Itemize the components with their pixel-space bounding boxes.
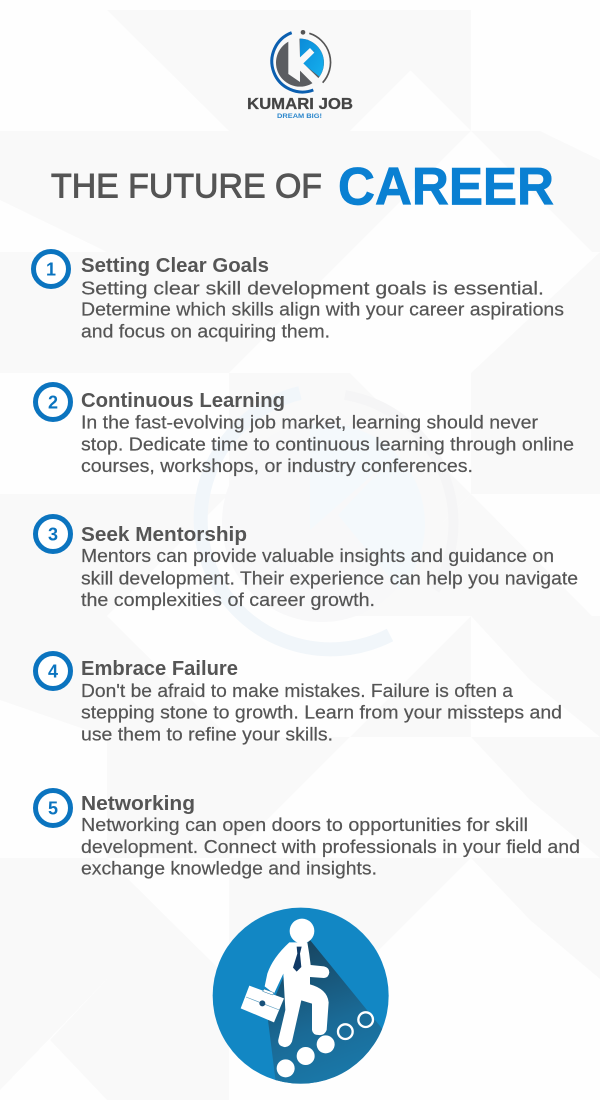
badge: number 3 xyxy=(36,516,70,552)
text block: step 4 description: stepping stone to growth. Learn from your missteps and xyxy=(81,702,562,722)
logo: Kumari Job xyxy=(247,30,353,120)
text block: step 1 description: Determine which skills align with your career aspirations xyxy=(81,298,564,320)
panel: step 5 xyxy=(36,790,580,878)
panel: step 1 xyxy=(34,252,564,342)
badge: number 5 xyxy=(36,790,70,826)
text block: step 3 description: skill development. Their experience can help you navigate xyxy=(81,568,578,588)
text block: step 3 description: the complexities of career growth. xyxy=(81,589,375,610)
text block: step 1 description: and focus on acquiring them. xyxy=(81,320,330,342)
badge: number 4: 4 xyxy=(48,662,58,682)
text block: step 5 description: development. Connect with professionals in your field and xyxy=(81,836,580,857)
text block: step 3 description: Mentors can provide valuable insights and guidance on xyxy=(81,545,554,566)
text block: step 2 description: stop. Dedicate time to continuous learning through online xyxy=(81,434,574,454)
heading: Seek Mentorship: Seek Mentorship xyxy=(81,524,247,546)
heading: Setting Clear Goals: Setting Clear Goals xyxy=(81,255,269,277)
text block: step 3 description xyxy=(81,545,578,610)
text block: step 2 description xyxy=(81,412,574,476)
badge: number 2 xyxy=(36,384,70,420)
text block: step 5 description xyxy=(81,814,580,878)
title: first part: THE FUTURE OF xyxy=(51,168,322,206)
panel: step 2 xyxy=(36,384,574,476)
text block: step 5 description: exchange knowledge and insights. xyxy=(81,858,377,878)
badge: number 2: 2 xyxy=(48,392,58,412)
heading: Continuous Learning: Continuous Learning xyxy=(81,390,285,412)
icon: businessman climbing steps xyxy=(213,908,390,1095)
text block: step 4 description: Don't be afraid to make mistakes. Failure is often a xyxy=(81,680,514,701)
heading: Networking: Networking xyxy=(81,793,195,815)
badge: number 1 xyxy=(34,252,68,286)
text block: step 4 description: use them to refine your skills. xyxy=(81,724,333,744)
text: tagline: DREAM BIG! xyxy=(277,113,322,120)
text block: step 1 description: Setting clear skill development goals is essential. xyxy=(81,278,544,298)
text block: step 5 description: Networking can open doors to opportunities for skill xyxy=(81,814,528,835)
badge: number 1: 1 xyxy=(46,260,56,280)
text: company name: KUMARI JOB xyxy=(247,96,353,113)
panel: step 4 xyxy=(36,654,562,744)
text block: step 1 description xyxy=(81,278,564,342)
title: highlighted word: CAREER xyxy=(338,158,554,216)
badge: number 5: 5 xyxy=(48,798,58,818)
panel: step 3 xyxy=(36,516,578,610)
badge: number 4 xyxy=(36,654,70,688)
heading: Embrace Failure: Embrace Failure xyxy=(81,658,238,680)
watermark: large faded logo xyxy=(201,393,453,649)
text block: step 2 description: courses, workshops, or industry conferences. xyxy=(81,455,473,476)
icon: logo ring and K xyxy=(272,30,331,92)
badge: number 3: 3 xyxy=(48,524,58,544)
title xyxy=(51,158,554,216)
text block: step 4 description xyxy=(81,680,562,744)
text block: step 2 description: In the fast-evolving job market, learning should never xyxy=(81,412,538,432)
